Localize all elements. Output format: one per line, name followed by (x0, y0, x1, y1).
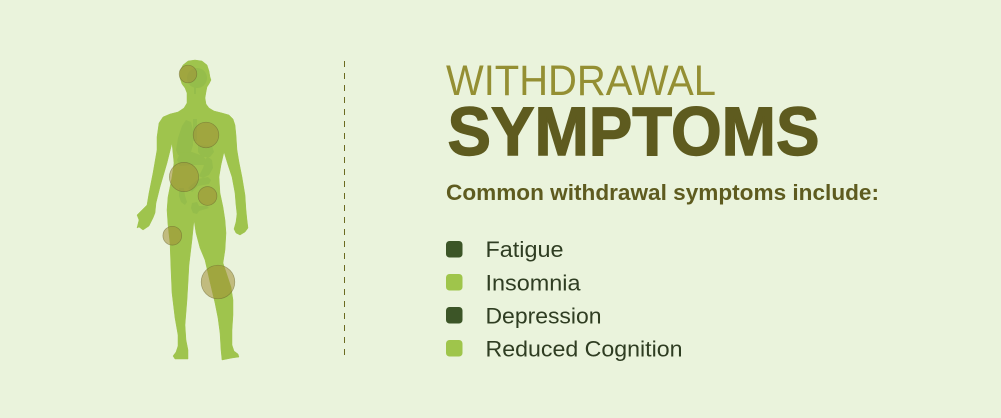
brain stem (194, 86, 196, 94)
trachea (193, 119, 197, 141)
spot: head (179, 65, 197, 83)
item: reduced cognition: Reduced Cognition (486, 336, 682, 362)
brain (187, 68, 207, 88)
right abdominal organ (199, 156, 213, 178)
spot: chest (193, 122, 219, 148)
vertical dashed divider (344, 61, 346, 357)
stomach and liver (177, 152, 208, 166)
spot: knee (201, 265, 235, 299)
left lung (176, 120, 193, 155)
title: withdrawal: WITHDRAWAL (446, 57, 716, 105)
item: fatigue: Fatigue (486, 237, 564, 262)
intestines (188, 177, 211, 192)
body silhouette (137, 60, 248, 360)
item: depression: Depression (486, 304, 602, 328)
title: symptoms: SYMPTOMS (448, 93, 820, 170)
internal organs (176, 68, 214, 214)
spot: abdomen right (198, 187, 217, 205)
item: insomnia (446, 270, 581, 296)
symptom spots (163, 65, 235, 299)
symptoms list (446, 237, 682, 362)
item: fatigue (446, 237, 564, 262)
spot: abdomen left (169, 162, 199, 192)
subheading: Common withdrawal symptoms include: (446, 180, 879, 205)
spot: thigh (163, 226, 182, 245)
item: insomnia: Insomnia (486, 270, 581, 296)
human body figure (137, 60, 248, 360)
right lung (198, 145, 214, 157)
